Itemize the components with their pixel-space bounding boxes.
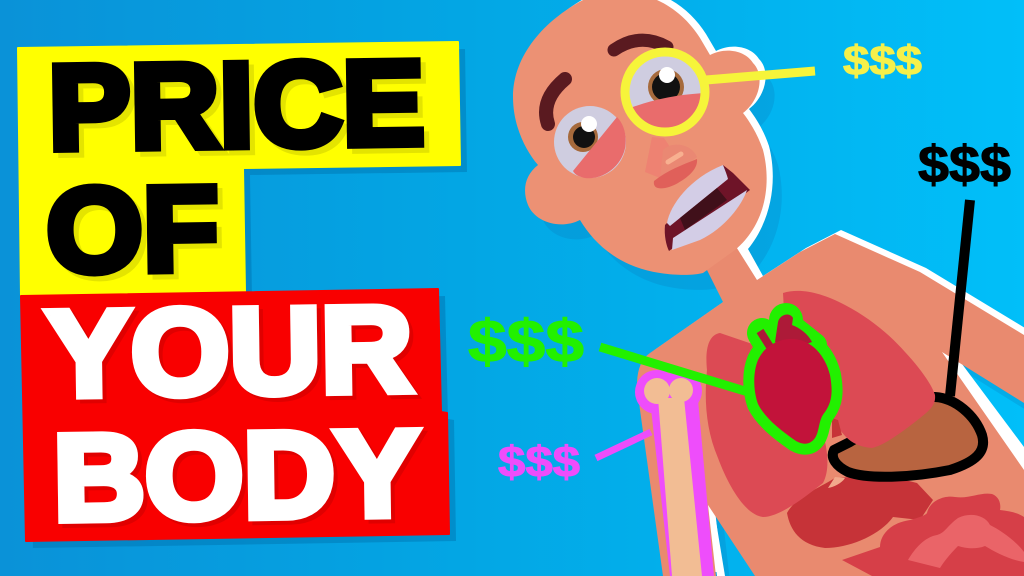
- organ: aorta detail: [832, 418, 842, 438]
- title line: YOUR: YOUR: [45, 281, 413, 422]
- organ: liver: [833, 397, 983, 477]
- organ: right lung: [783, 291, 935, 448]
- small organ detail: [828, 477, 845, 488]
- price label: heart: $$$: [468, 308, 584, 375]
- line to eye: [706, 71, 815, 80]
- yellow highlight ring: [625, 52, 705, 132]
- organ: left lung: [706, 333, 827, 517]
- red title panel: [21, 281, 449, 550]
- organ: stomach: [787, 475, 933, 548]
- mouth: [665, 165, 750, 251]
- left eyebrow: [546, 79, 565, 124]
- right eyebrow: [614, 40, 667, 50]
- organ: intestines highlight: [908, 515, 1024, 568]
- yellow title panel: [18, 36, 460, 303]
- title line: BODY: BODY: [57, 409, 424, 550]
- title line: PRICE: PRICE: [53, 41, 430, 180]
- right eye: [630, 56, 700, 128]
- title line: PRICE: PRICE: [47, 36, 425, 175]
- price label: eye: $$$: [843, 37, 922, 84]
- figure white outline: [519, 0, 1024, 576]
- title line: BODY: BODY: [52, 405, 420, 546]
- left eye: [554, 106, 626, 178]
- nose: [645, 137, 697, 188]
- bone with magenta outline: [635, 370, 714, 576]
- line to heart: [600, 347, 748, 392]
- title panel shadow: [25, 49, 467, 548]
- line to liver: [950, 200, 970, 396]
- torso and arms: [637, 234, 1024, 576]
- title line: YOUR: YOUR: [50, 285, 417, 426]
- title line: OF: OF: [51, 167, 224, 303]
- body shadow: [528, 15, 1024, 576]
- price label: liver: $$$: [918, 136, 1011, 194]
- organ: heart: [754, 315, 832, 444]
- price label: bone: $$$: [498, 438, 580, 487]
- organ: intestines: [842, 494, 1024, 576]
- line to bone: [596, 432, 651, 458]
- title line: OF: OF: [45, 162, 219, 298]
- head: [513, 0, 767, 275]
